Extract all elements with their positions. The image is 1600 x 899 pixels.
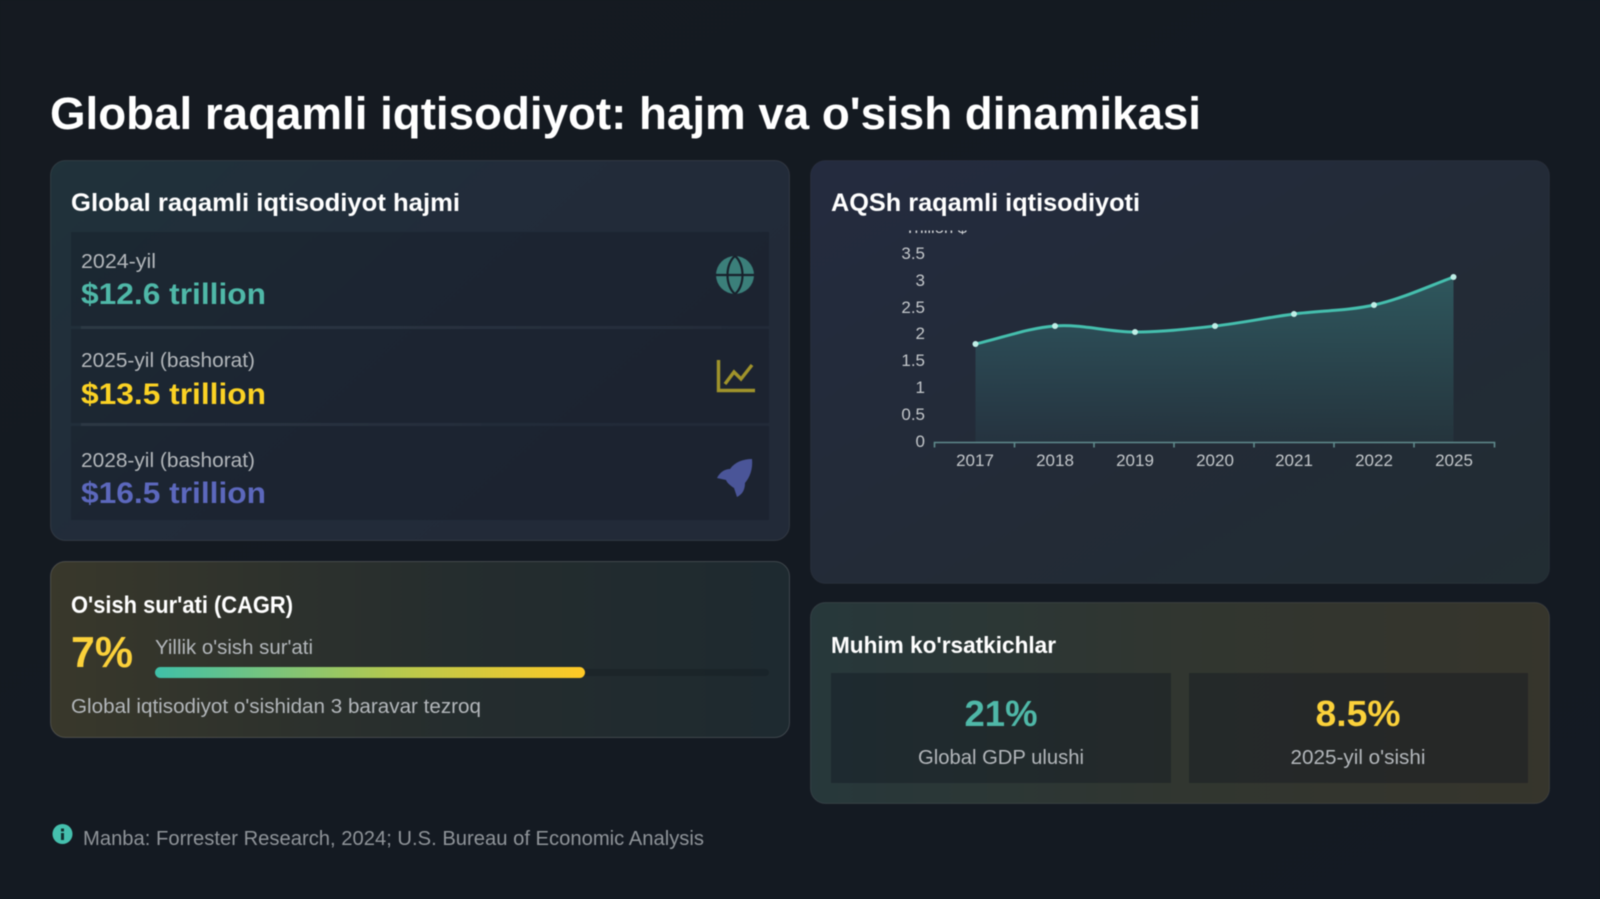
panel heading: AQSh raqamli iqtisodiyoti bbox=[831, 189, 1140, 217]
y axis labels: 1 bbox=[916, 378, 925, 397]
source text: Manba: Forrester Research, 2024; U.S. Bureau of Economic Analysis bbox=[83, 827, 704, 850]
x axis bbox=[934, 442, 1494, 448]
panel heading: O'sish sur'ati (CAGR) bbox=[71, 592, 293, 619]
row: 2024 bbox=[71, 232, 769, 329]
area chart bbox=[901, 220, 1494, 470]
y axis labels: 3 bbox=[916, 271, 925, 290]
stat card: 2025 growth: 8.5% bbox=[1316, 693, 1400, 734]
x axis labels: 2018 bbox=[1036, 451, 1074, 470]
y axis labels: 1.5 bbox=[901, 351, 925, 370]
area fill bbox=[976, 277, 1454, 442]
stat card: GDP share: Global GDP ulushi bbox=[918, 747, 1084, 769]
row: 2024: 2024-yil bbox=[81, 251, 156, 273]
icon: globe bbox=[716, 256, 754, 294]
data points bbox=[972, 274, 1456, 347]
stat card: 2025 growth: 2025-yil o'sishi bbox=[1290, 747, 1426, 769]
y axis labels: 2.5 bbox=[901, 298, 925, 317]
x axis labels: 2020 bbox=[1196, 451, 1234, 470]
panel: growth rate CAGR bbox=[50, 562, 790, 738]
row: 2025 forecast: $13.5 trillion bbox=[81, 378, 266, 411]
row: 2028 forecast: $16.5 trillion bbox=[81, 477, 266, 510]
icon: rocket bbox=[717, 459, 752, 497]
clipped axis unit label: Trillion $ bbox=[905, 220, 968, 237]
panel heading: Muhim ko'rsatkichlar bbox=[831, 632, 1056, 658]
panel: global digital economy size bbox=[50, 160, 790, 540]
description: Global iqtisodiyot o'sishidan 3 baravar tezroq bbox=[71, 696, 481, 718]
y axis labels: 3.5 bbox=[901, 244, 925, 263]
panel: key indicators bbox=[810, 602, 1550, 804]
y axis labels: 2 bbox=[916, 324, 925, 343]
icon: line chart bbox=[718, 360, 755, 390]
x axis labels: 2017 bbox=[956, 451, 994, 470]
title: Global raqamli iqtisodiyot: hajm va o'sish dinamikasi bbox=[50, 88, 1201, 139]
panel: US digital economy chart bbox=[810, 160, 1550, 584]
big number: 7% bbox=[71, 628, 133, 677]
row: 2024: $12.6 trillion bbox=[81, 278, 266, 311]
y axis labels: 0 bbox=[916, 432, 925, 451]
stat card: 2025 growth bbox=[1189, 673, 1528, 783]
x axis labels: 2025 bbox=[1435, 451, 1473, 470]
infographic canvas bbox=[50, 95, 1550, 850]
stat card: GDP share: 21% bbox=[964, 693, 1038, 734]
bar label: Yillik o'sish sur'ati bbox=[155, 637, 313, 659]
x axis labels bbox=[956, 451, 1473, 470]
y axis labels: 0.5 bbox=[901, 405, 925, 424]
source note bbox=[52, 824, 704, 850]
trend line bbox=[976, 277, 1454, 344]
x axis labels: 2019 bbox=[1116, 451, 1154, 470]
row: 2025 forecast: 2025-yil (bashorat) bbox=[81, 350, 255, 372]
row: 2028 forecast bbox=[71, 426, 769, 520]
row: 2028 forecast: 2028-yil (bashorat) bbox=[81, 450, 255, 472]
y axis labels bbox=[901, 244, 925, 451]
x axis labels: 2021 bbox=[1275, 451, 1313, 470]
row: 2025 forecast bbox=[71, 329, 769, 426]
x axis labels: 2022 bbox=[1355, 451, 1393, 470]
icon: info bbox=[52, 824, 72, 844]
panel heading: Global raqamli iqtisodiyot hajmi bbox=[71, 189, 460, 217]
stat card: GDP share bbox=[831, 673, 1171, 783]
progress bar bbox=[155, 667, 769, 678]
